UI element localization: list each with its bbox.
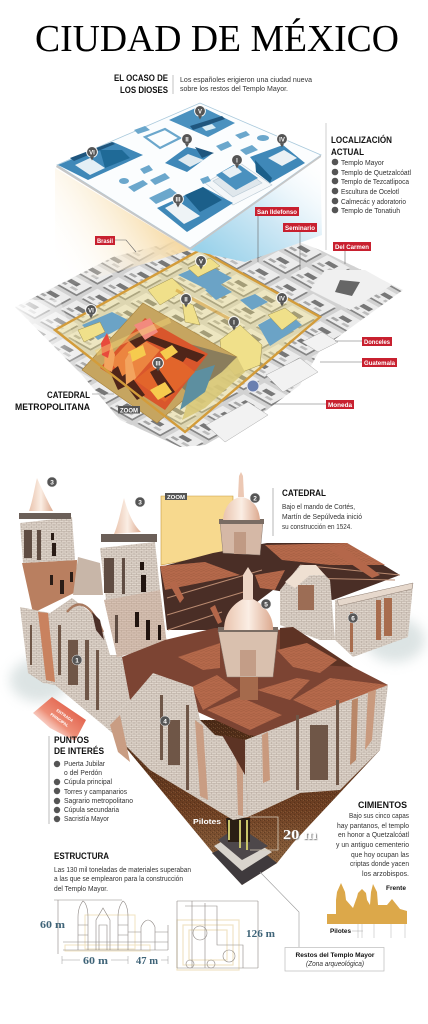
left sagrario facade (103, 673, 248, 820)
right tower (100, 498, 167, 657)
cimientos text: que hoy ocupan las (351, 852, 409, 859)
wedge projection right (190, 155, 322, 262)
metro symbol (247, 380, 259, 392)
zoom tag on map: ZOOM (120, 408, 138, 414)
puntos de interés: Sacristía Mayor (64, 816, 110, 823)
catedral text block: CATEDRAL (282, 488, 326, 499)
complex VI (58, 142, 143, 180)
upper temple markers: IV (279, 138, 285, 144)
rear sacristy wing (335, 583, 413, 657)
street labels: Moneda (328, 402, 352, 409)
nave roof (160, 543, 400, 630)
upper temple markers: III (175, 198, 181, 204)
cimientos text: Bajo sus cinco capas (349, 813, 409, 820)
pilotes label: Pilotes (193, 817, 221, 826)
lower temple markers (86, 256, 287, 372)
lower temple markers: IV (279, 296, 285, 302)
plan diagram (177, 901, 258, 970)
ancient temple plan (56, 103, 321, 250)
estructura text: ESTRUCTURA (54, 851, 109, 862)
cathedral number markers: 4 (163, 718, 167, 726)
cimientos text: criptas donde yacen (350, 861, 409, 868)
cathedral number markers: 6 (351, 616, 355, 622)
street labels: Guatemala (364, 360, 395, 367)
depth marker 20 m (250, 817, 317, 850)
catedral text block: Bajo el mando de Cortés, (282, 504, 355, 511)
lower temple markers: VI (88, 308, 94, 314)
puntos de interés: DE INTERÉS (54, 746, 104, 757)
cimientos text: CIMIENTOS (358, 800, 407, 811)
location list: Escultura de Ocelotl (341, 189, 399, 196)
location list: ACTUAL (331, 147, 364, 158)
street labels: San Ildefonso (257, 209, 297, 216)
del carmen block (310, 270, 392, 310)
puntos de interés: Cúpula principal (64, 779, 112, 786)
entrance arrow (33, 697, 86, 741)
intro text (173, 75, 312, 94)
subsoil wedge (117, 720, 380, 885)
intro heading (114, 73, 168, 95)
cathedral number markers (47, 477, 358, 726)
upper temple markers: I (236, 158, 238, 164)
intro text: Los españoles erigieron una ciudad nueva (180, 77, 312, 84)
depth marker 20 m: 20 m (283, 828, 317, 843)
street labels: Donceles (364, 339, 390, 346)
entrance arrow: PRINCIPAL (49, 712, 70, 728)
intro heading: LOS DIOSES (120, 85, 168, 95)
complex IV (250, 145, 305, 183)
street labels (95, 207, 397, 409)
buried pyramid steps (212, 826, 277, 885)
puntos de interés: Puerta Jubilar (64, 761, 106, 768)
street labels: Brasil (97, 238, 113, 245)
label: catedral metropolitana: METROPOLITANA (15, 402, 90, 413)
puntos de interés: Torres y campanarios (64, 789, 127, 796)
dimension 60 m and 47 m wide (62, 956, 168, 967)
yellow heritage overlay (55, 250, 320, 432)
cathedral number markers: 3 (138, 500, 142, 506)
main dome (219, 472, 264, 555)
puntos de interés: Sagrario metropolitano (64, 798, 133, 805)
lower temple markers: V (199, 260, 203, 266)
complex II (165, 147, 214, 172)
estructura text: a las que se emplearon para la construcción (54, 876, 183, 883)
estructura text (54, 851, 191, 893)
puntos de interés: PUNTOS (54, 735, 89, 746)
cimientos text: en honor a Quetzalcóatl (338, 832, 409, 839)
cimientos text: los arzobispos. (362, 871, 409, 878)
zoom backdrop square (161, 493, 233, 565)
cathedral number markers: 1 (75, 658, 79, 664)
wedge projection left (55, 168, 190, 290)
cathedral number markers: 5 (264, 602, 268, 608)
location list: Templo de Tezcatlipoca (341, 179, 409, 186)
upper temple markers (87, 106, 287, 208)
dimension 126 m: 126 m (246, 929, 276, 940)
dimension 60 m and 47 m wide: 47 m (136, 956, 159, 967)
label: catedral metropolitana (15, 390, 114, 413)
puntos de interés (49, 735, 133, 824)
dimension 60 m tall: 60 m (40, 920, 66, 931)
temple remains callout: Restos del Templo Mayor (296, 952, 375, 959)
upper temple markers: V (198, 110, 202, 116)
small temple structures (119, 126, 269, 204)
estructura text: Las 130 mil toneladas de materiales superaban (54, 867, 191, 874)
cathedral number markers: 2 (253, 496, 257, 502)
west facade (20, 557, 130, 725)
zoom tag on map (118, 406, 140, 414)
lower temple markers: III (155, 362, 161, 368)
puntos de interés: Cúpula secundaria (64, 807, 119, 814)
catedral ground footprint and red model (82, 303, 245, 423)
entrance arrow: ENTRADA (55, 708, 74, 723)
cathedral number markers: 3 (50, 480, 54, 486)
modern city map (5, 227, 403, 447)
leader line to temple remains (260, 872, 299, 947)
upper temple markers: II (185, 138, 189, 144)
sagrario dome (218, 567, 278, 700)
lower temple markers: II (184, 298, 188, 304)
transept facade (280, 565, 335, 640)
location list: Templo Mayor (341, 160, 385, 167)
cimientos text: hay pantanos, el templo (337, 823, 409, 830)
temple I stepped pyramid (205, 163, 272, 205)
excavated yellow structures (78, 258, 298, 375)
donceles and guatemala blocks (206, 332, 338, 442)
intro text: sobre los restos del Templo Mayor. (180, 86, 288, 93)
location list: Templo de Tonatiuh (341, 208, 400, 215)
location list: Calmecác y adoratorio (341, 199, 406, 206)
location list: LOCALIZACIÓN (331, 134, 392, 146)
right sagrario facade (245, 685, 388, 817)
street labels: Del Carmen (335, 244, 369, 251)
frente gold silhouette diagram (327, 883, 407, 938)
frente gold silhouette diagram: Frente (386, 885, 406, 892)
frente gold silhouette diagram: Pilotes (330, 928, 351, 935)
street labels: Seminario (285, 225, 315, 232)
label: catedral metropolitana: CATEDRAL (47, 390, 90, 401)
location list: Templo de Quetzalcóatl (341, 170, 411, 177)
estructura text: del Templo Mayor. (54, 886, 108, 893)
puntos de interés: o del Perdón (64, 770, 102, 777)
lower temple markers: I (233, 320, 235, 326)
dimension 60 m and 47 m wide: 60 m (83, 956, 109, 967)
cathedral illustration (19, 472, 413, 820)
catedral text block (273, 488, 362, 536)
elevation diagram (54, 900, 168, 954)
orange site outline (55, 250, 320, 432)
piles shaft (226, 818, 250, 842)
location list (326, 123, 411, 250)
catedral text block: su construcción en 1524. (282, 524, 352, 531)
complex V (169, 106, 235, 137)
left tower (19, 478, 77, 613)
excavated blue areas (82, 263, 302, 346)
title: CIUDAD DE MÉXICO (35, 18, 399, 60)
cathedral soft shadow (10, 618, 425, 702)
upper temple markers: VI (89, 150, 95, 156)
intro heading: EL OCASO DE (114, 73, 168, 83)
catedral text block: Martín de Sepúlveda inició (282, 514, 362, 521)
temple remains callout: (Zona arqueológica) (306, 961, 364, 968)
cimientos text: y un antiguo cementerio (336, 842, 409, 849)
cimientos text (336, 800, 409, 878)
sagrario roofs and walls (103, 627, 388, 820)
temple remains callout (285, 948, 384, 971)
complex III (157, 187, 233, 232)
zoom backdrop square: ZOOM (167, 495, 185, 501)
